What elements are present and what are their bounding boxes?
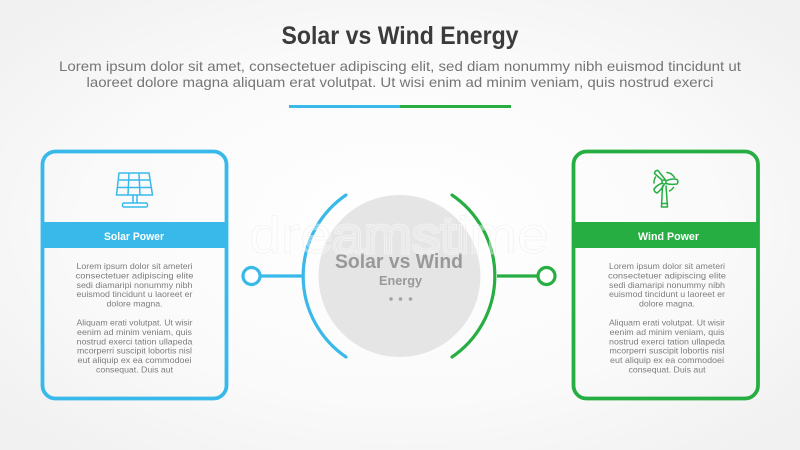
solar body text: [76, 261, 194, 374]
wind body text: consequat. Duis aut: [628, 364, 706, 374]
subtitle text: [59, 58, 741, 90]
watermark: dreamstime: [249, 207, 549, 265]
wind body text: dolore magna.: [639, 299, 695, 309]
solar label band: Solar Power: [104, 231, 165, 243]
wind body text: sedi diamaripi nonummy nibh: [609, 280, 725, 290]
solar body text: Aliquam erati volutpat. Ut wisir: [76, 318, 193, 328]
center circle: [318, 195, 480, 357]
wind body text: Lorem ipsum dolor sit ameteri: [609, 261, 725, 271]
wind body text: consectetuer adipiscing elite: [608, 270, 726, 280]
watermark: dreamstime: [249, 207, 549, 265]
wind body text: mcorperri suscipit lobortis nisl: [610, 346, 725, 356]
solar body text: euismod tincidunt u laoreet er: [76, 289, 193, 299]
wind card outline: [574, 152, 758, 398]
title underline: [289, 105, 511, 108]
wind body text: [608, 261, 726, 374]
solar body text: consequat. Duis aut: [96, 364, 174, 374]
wind label band: Wind Power: [638, 231, 700, 243]
title: Solar vs Wind Energy: [282, 22, 519, 50]
solar body text: mcorperri suscipit lobortis nisl: [77, 346, 192, 356]
subtitle text: laoreet dolore magna aliquam erat volutpat. Ut wisi enim ad minim veniam, quis nostrud exerci: [86, 74, 714, 90]
solar body text: eut aliquip ex ea commodoei: [78, 355, 192, 365]
right arc connector: [452, 195, 555, 357]
solar card outline: [42, 152, 226, 398]
solar body text: consectetuer adipiscing elite: [76, 270, 194, 280]
panel: solar power: [42, 152, 226, 398]
icon: solar panel: [116, 173, 152, 207]
center heading: Solar vs Wind: [335, 251, 463, 273]
solar body text: eenim ad minim veniam, quis: [77, 327, 192, 337]
wind body text: nostrud exerci tation ullapeda: [609, 336, 725, 346]
three dots: [389, 297, 412, 301]
solar body text: sedi diamaripi nonummy nibh: [76, 280, 193, 290]
panel: wind power: [573, 152, 758, 398]
solar body text: Lorem ipsum dolor sit ameteri: [76, 261, 193, 271]
solar body text: dolore magna.: [106, 299, 162, 309]
subtitle text: Lorem ipsum dolor sit amet, consectetuer adipiscing elit, sed diam nonummy nibh euismod tincidunt ut: [59, 58, 741, 74]
solar label band: [42, 222, 226, 248]
wind body text: eut aliquip ex ea commodoei: [610, 355, 724, 365]
center subheading: Energy: [379, 273, 423, 288]
wind body text: euismod tincidunt u laoreet er: [609, 289, 725, 299]
wind body text: Aliquam erati volutpat. Ut wisir: [609, 318, 725, 328]
wind label band: [573, 222, 758, 248]
wind body text: eenim ad minim veniam, quis: [610, 327, 724, 337]
solar body text: nostrud exerci tation ullapeda: [76, 336, 193, 346]
icon: wind turbine: [654, 170, 678, 207]
left arc connector: [243, 195, 346, 357]
